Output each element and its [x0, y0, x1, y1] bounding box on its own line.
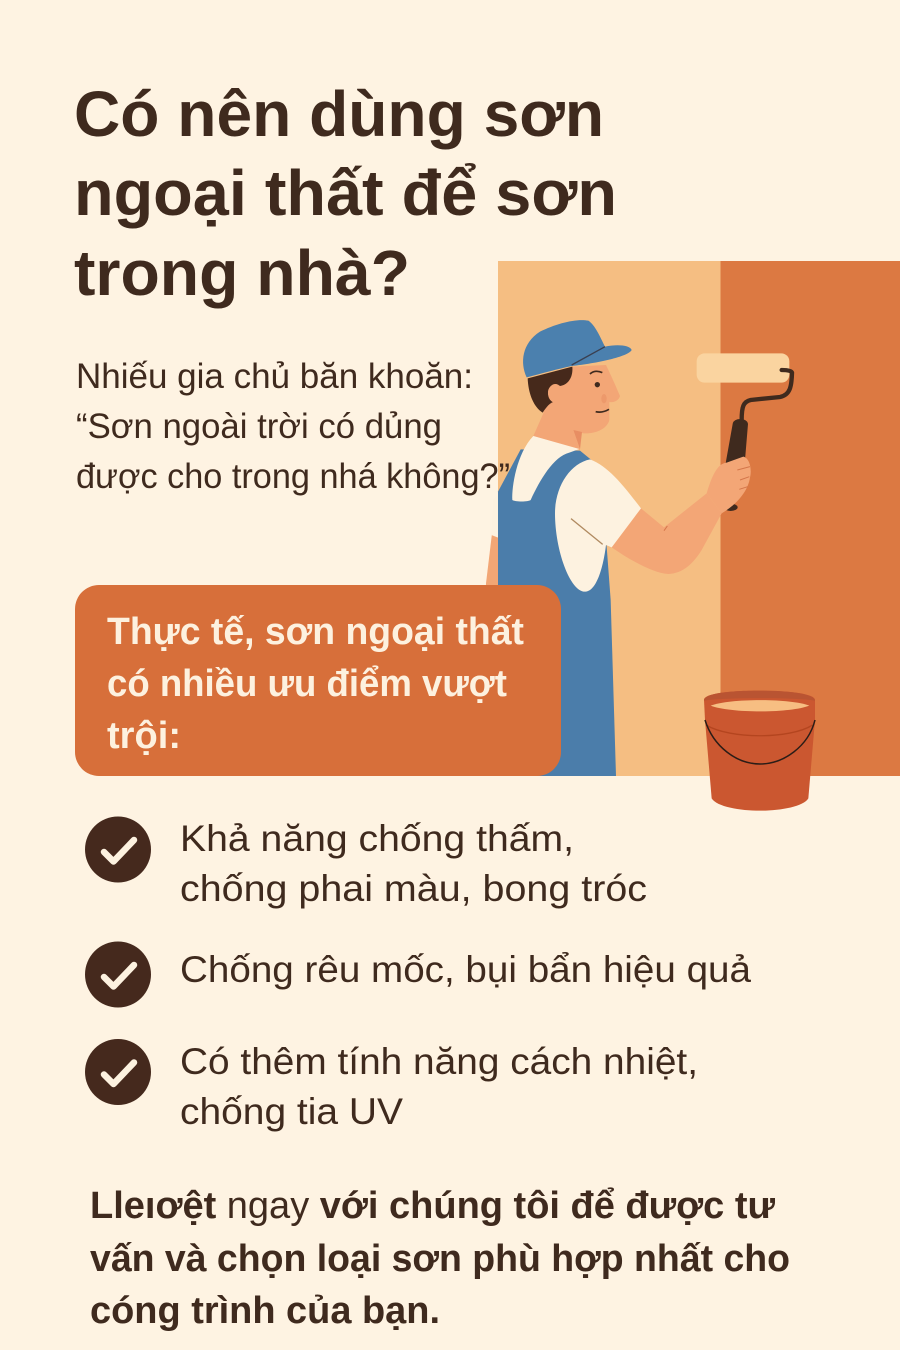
cap	[523, 320, 632, 377]
wall: unpainted section	[498, 261, 721, 776]
closing call to action	[90, 1185, 790, 1332]
benefit 3 text: chống tia UV	[180, 1091, 403, 1132]
elbow mark	[664, 526, 667, 531]
intro text: “Sơn ngoài trời có dủng	[76, 407, 442, 446]
callout text	[107, 611, 524, 757]
roller frame	[742, 370, 792, 420]
benefit 2	[85, 942, 751, 1008]
eye	[595, 382, 600, 387]
hair	[528, 367, 572, 413]
closing call to action: Lleıơệt ngay với chúng tôi để được tư	[90, 1185, 775, 1227]
bucket rim	[704, 691, 815, 701]
cap seam	[572, 347, 605, 365]
callout text: Thực tế, sơn ngoại thất	[107, 611, 524, 653]
callout	[75, 585, 561, 776]
benefit 1 text: Khả năng chống thấm,	[180, 818, 574, 859]
paint roller cover	[697, 353, 789, 383]
finger lines	[737, 467, 750, 489]
closing call to action: cóng trình của bạn.	[90, 1290, 440, 1332]
mouth	[596, 409, 609, 412]
far sleeve	[491, 493, 500, 538]
benefit 1 text	[180, 818, 647, 909]
callout text: trội:	[107, 715, 181, 757]
icon: check 3	[85, 1039, 151, 1105]
benefit 3 text: Có thêm tính năng cách nhiệt,	[180, 1041, 698, 1082]
ear	[548, 384, 563, 403]
overalls	[498, 449, 616, 776]
paint surface	[711, 700, 809, 711]
intro text: Nhiếu gia chủ băn khoăn:	[76, 357, 473, 396]
grip end	[724, 504, 738, 511]
neck shadow	[573, 430, 582, 449]
neck and face	[533, 365, 620, 450]
title	[74, 78, 617, 309]
icon: check 1	[85, 816, 151, 882]
intro text: được cho trong nhá không?”	[76, 457, 510, 496]
callout background	[75, 585, 561, 776]
shirt sleeve and body	[555, 459, 641, 592]
sleeve crease	[571, 519, 603, 544]
intro text	[76, 357, 510, 496]
icon: paint bucket	[704, 691, 815, 811]
benefit 2 text: Chống rêu mốc, bụi bẩn hiệu quả	[180, 949, 751, 990]
closing call to action: vấn và chọn loại sơn phù hợp nhất cho	[90, 1238, 790, 1280]
bucket handle	[705, 720, 815, 764]
eyebrow	[590, 371, 602, 374]
nose shading	[601, 394, 607, 403]
shirt collar	[512, 436, 579, 501]
title: Có nên dùng sơn	[74, 78, 604, 150]
benefit 3 text	[180, 1041, 698, 1132]
benefits list	[85, 816, 751, 1132]
painter figure	[480, 320, 792, 776]
icon: check 2	[85, 942, 151, 1008]
title: trong nhà?	[74, 237, 410, 309]
bucket body	[704, 691, 815, 811]
benefit 1	[85, 816, 647, 909]
far arm	[480, 533, 500, 776]
roller grip	[725, 419, 748, 465]
benefit 3	[85, 1039, 698, 1132]
wall: painted section	[720, 261, 900, 776]
callout text: có nhiều ưu điểm vượt	[107, 663, 507, 705]
illustration: painter at wall	[480, 261, 900, 811]
raised arm	[612, 493, 722, 574]
benefit 1 text: chống phai màu, bong tróc	[180, 868, 647, 909]
bucket band	[706, 725, 813, 736]
title: ngoại thất để sơn	[74, 157, 617, 229]
hand	[707, 457, 751, 513]
